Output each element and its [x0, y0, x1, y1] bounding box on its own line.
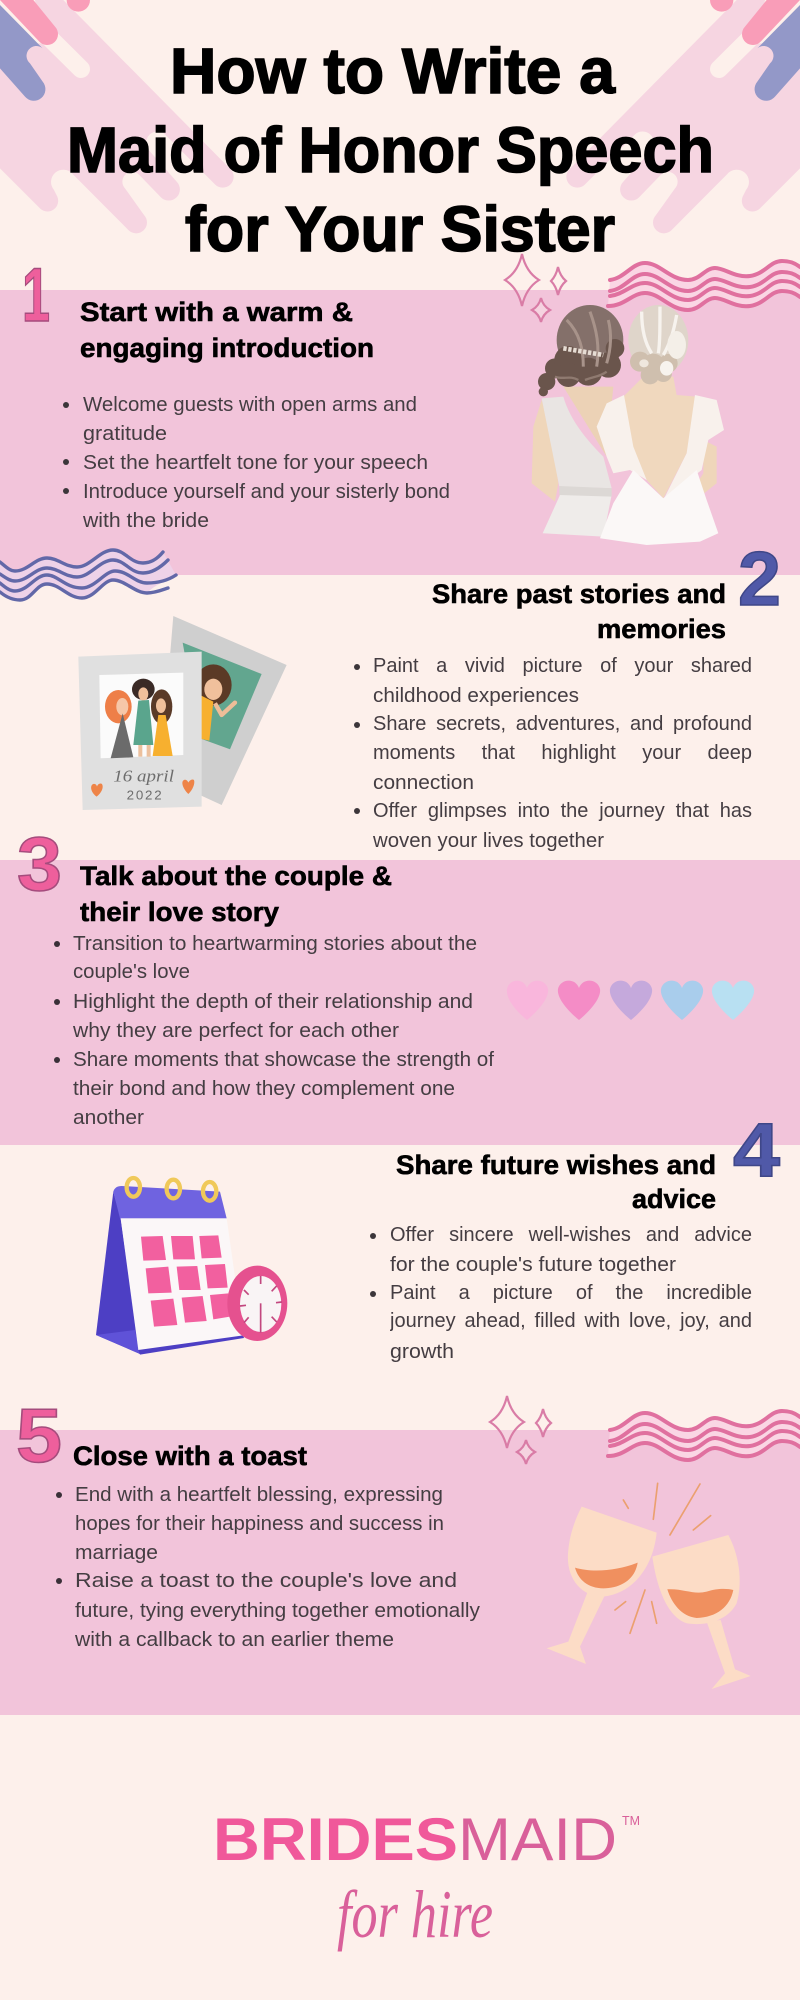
bullet list: step 1: Introduce yourself and your sisterly bond [83, 481, 450, 503]
bullet list: step 5: with a callback to an earlier theme [74, 1629, 394, 1651]
bullet list: step 3: why they are perfect for each other [72, 1020, 399, 1042]
number 2: 2 [738, 537, 781, 622]
bullet list: step 1: gratitude [83, 423, 167, 445]
number 3: 3 [17, 822, 62, 907]
bullet list: step 5: future, tying everything together emotionally [75, 1600, 480, 1622]
heading: step 5: Close with a toast [73, 1441, 307, 1471]
heading: step 1 [80, 297, 374, 363]
bullet list: step 4 [370, 1224, 752, 1363]
logo: Bridesmaid for hire: for hire [337, 1876, 493, 1952]
bullet list: step 2: childhood experiences [373, 685, 579, 707]
bullet list: step 5: hopes for their happiness and success in [75, 1513, 444, 1535]
squiggle lines: pink [608, 1411, 800, 1460]
bullet list: step 4: Offer sincere well-wishes and advice [390, 1224, 752, 1246]
heading: step 3 [80, 861, 392, 927]
bullet list: step 4: journey ahead, filled with love, joy, and [390, 1310, 752, 1332]
heading: step 4: Share future wishes and [396, 1150, 716, 1180]
heading: step 1: Start with a warm & [80, 297, 353, 327]
bullet list: step 2 [354, 655, 752, 852]
panel: step 3 love story [0, 822, 800, 1145]
illustration: two brides from behind [532, 305, 724, 545]
squiggle lines: pink [608, 261, 800, 310]
bullet list: step 3: Highlight the depth of their relationship and [73, 991, 473, 1013]
bullet list: step 1: Set the heartfelt tone for your speech [83, 452, 428, 474]
bullet list: step 5: marriage [75, 1542, 158, 1564]
bullet list: step 3 [54, 933, 494, 1129]
logo: Bridesmaid for hire: MAID [458, 1806, 617, 1873]
icon: row of hearts [507, 981, 754, 1020]
top left corner shape [0, 0, 234, 233]
bullet list: step 2: moments that highlight your deep [373, 742, 752, 764]
heading: step 2 [432, 579, 726, 644]
panel: step 4 future wishes [96, 1108, 780, 1363]
panel: step 5 toast [0, 1394, 800, 1715]
bullet list: step 3: their bond and how they complement one [73, 1078, 455, 1100]
top right corner shape [566, 0, 800, 233]
heading: step 2: memories [597, 614, 726, 644]
title: Maid of Honor Speech [67, 114, 714, 186]
heading: step 2: Share past stories and [432, 579, 726, 609]
panel: step 2 stories [0, 537, 781, 852]
title: How to Write a [170, 35, 615, 107]
number 4: 4 [733, 1108, 780, 1193]
bullet list: step 3: couple's love [73, 961, 190, 983]
logo: Bridesmaid for hire: BRIDES [213, 1806, 458, 1873]
illustration: clinking wine glasses [547, 1483, 751, 1689]
title [67, 35, 714, 265]
bullet list: step 4: Paint a picture of the incredible [390, 1282, 752, 1304]
bullet list: step 5: Raise a toast to the couple's love and [75, 1570, 457, 1592]
bullet list: step 2: Paint a vivid picture of your shared [373, 655, 752, 677]
heading: step 1: engaging introduction [80, 333, 374, 363]
illustration: calendar and clock [96, 1178, 287, 1355]
title: for Your Sister [185, 193, 615, 265]
logo: Bridesmaid for hire [213, 1806, 640, 1952]
bullet list: step 2: Share secrets, adventures, and profound [373, 713, 752, 735]
heading: step 4 [396, 1150, 716, 1214]
illustration: polaroid photos: 2022 [127, 787, 162, 802]
logo: Bridesmaid for hire: TM [622, 1813, 640, 1828]
bullet list: step 1: Welcome guests with open arms and [83, 394, 417, 416]
illustration: polaroid photos: 16 april [113, 767, 174, 786]
bullet list: step 4: for the couple's future together [390, 1254, 676, 1276]
panel: step 1 introduction [0, 253, 800, 575]
bullet list: step 3: another [73, 1107, 144, 1129]
icon: sparkles [505, 254, 566, 322]
decorative corner shapes [0, 0, 800, 233]
squiggle lines: blue [0, 550, 176, 600]
bullet list: step 2: Offer glimpses into the journey that has [373, 800, 752, 822]
bullet list: step 2: woven your lives together [372, 830, 604, 852]
heading: step 3: Talk about the couple & [80, 861, 392, 891]
number 1: 1 [22, 253, 50, 338]
bullet list: step 2: connection [373, 772, 474, 794]
bullet list: step 3: Share moments that showcase the strength of [73, 1049, 494, 1071]
bullet list: step 1 [63, 394, 450, 532]
bullet list: step 1: with the bride [82, 510, 209, 532]
heading: step 3: their love story [80, 897, 279, 927]
bullet list: step 3: Transition to heartwarming stories about the [73, 933, 477, 955]
illustration: polaroid photos [78, 616, 287, 810]
bullet list: step 5 [56, 1484, 480, 1651]
icon: sparkles [490, 1396, 551, 1464]
heading: step 4: advice [632, 1184, 716, 1214]
bullet list: step 4: growth [390, 1341, 454, 1363]
number 5: 5 [16, 1394, 62, 1479]
bullet list: step 5: End with a heartfelt blessing, expressing [75, 1484, 443, 1506]
